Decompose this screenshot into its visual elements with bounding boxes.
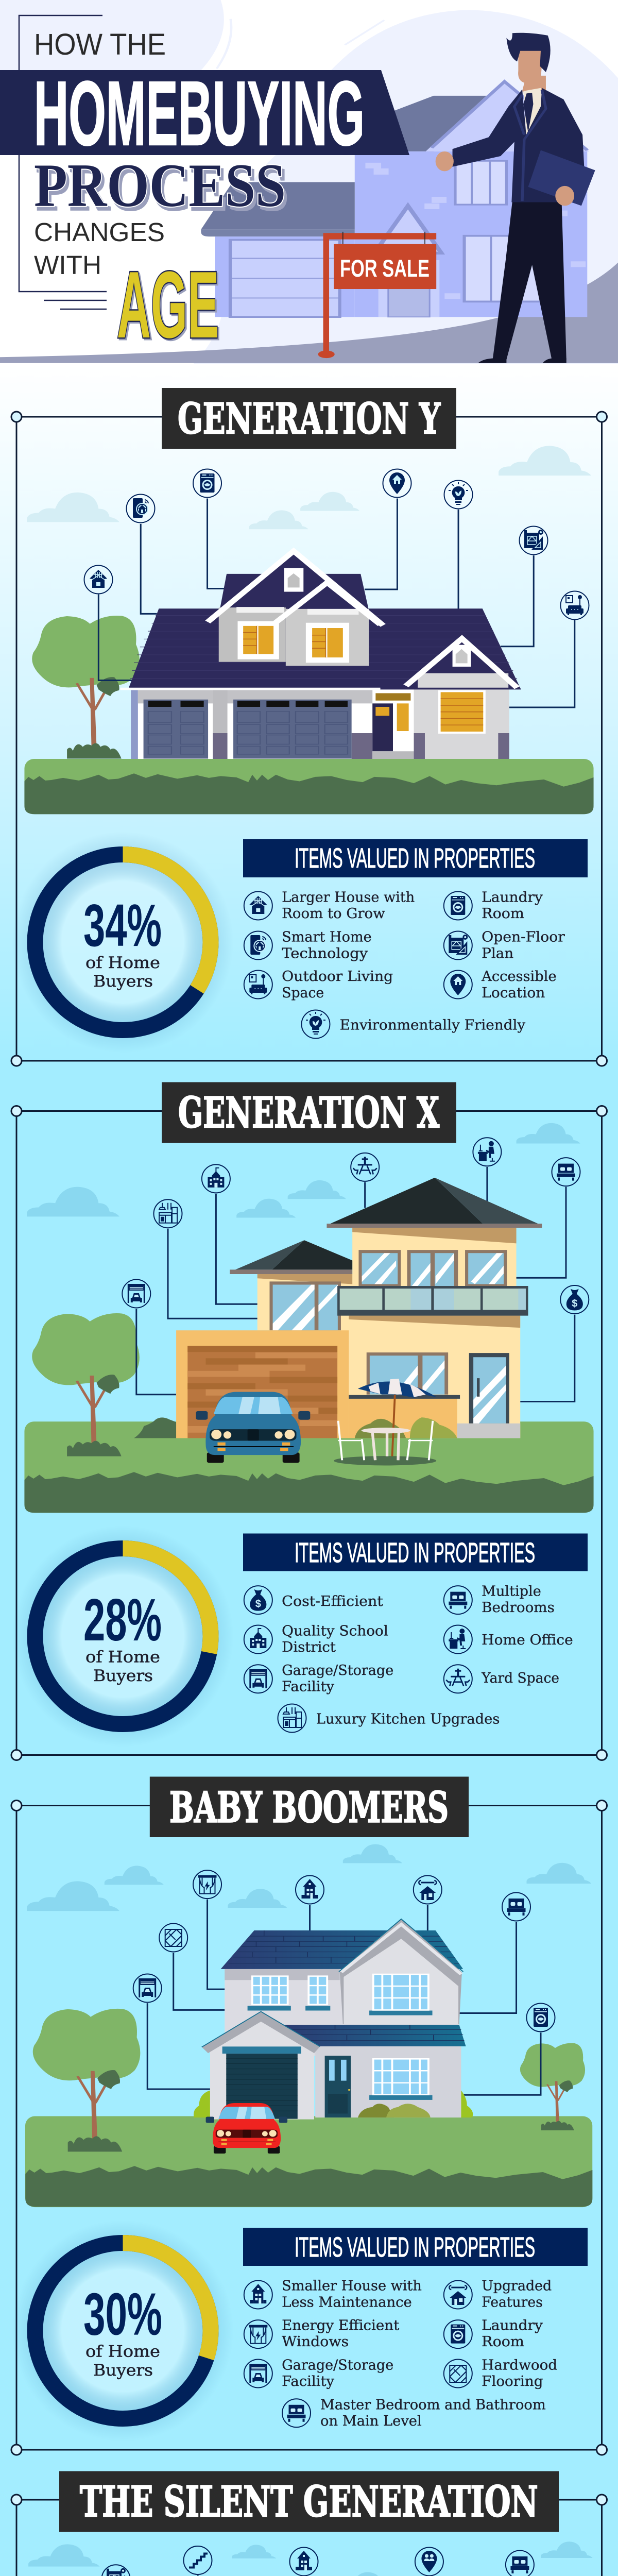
- item: garage storage: Garage/Storage: [282, 1663, 393, 1679]
- tree: [32, 616, 140, 759]
- item: accessible location: Location: [482, 985, 545, 1001]
- icon: laundry: [193, 469, 221, 498]
- donut chart: 34%: [12, 832, 234, 1053]
- item: hardwood flooring: [444, 2358, 557, 2389]
- item: laundry room: [444, 890, 543, 922]
- item: school district: [244, 1623, 388, 1655]
- item: cost-efficient: [244, 1586, 383, 1614]
- item: open floor plan: [444, 929, 565, 961]
- car: blue: [196, 1392, 310, 1463]
- item: hardwood flooring: Hardwood: [482, 2358, 557, 2373]
- for sale sign: FOR SALE: [340, 255, 430, 282]
- item: outdoor living: Space: [282, 985, 324, 1001]
- icon: kitchen: [153, 1199, 182, 1228]
- items panel: [243, 1533, 588, 1732]
- icon: laundry: [526, 2003, 555, 2032]
- clouds: [27, 446, 591, 529]
- item: laundry room: [444, 2317, 543, 2350]
- item: energy windows: Energy Efficient: [282, 2317, 399, 2333]
- callout lines: [98, 498, 575, 707]
- item: smart home: Technology: [282, 945, 368, 961]
- item: smart home: Smart Home: [282, 929, 372, 945]
- item: open floor plan: Plan: [482, 945, 513, 961]
- section: generation x: [10, 1082, 608, 1761]
- icon: school: [202, 1164, 230, 1193]
- donut chart: 28%: Buyers: [93, 1667, 153, 1685]
- title: with: WITH: [34, 250, 101, 280]
- item: open floor plan: Open-Floor: [482, 929, 565, 945]
- scene: house with callouts: [25, 1844, 592, 2207]
- icon: garage: [122, 1280, 150, 1308]
- icon: smaller house: [289, 2547, 318, 2576]
- items panel: [243, 2228, 588, 2429]
- callout lines: [67, 2575, 573, 2576]
- donut chart: 34%: Buyers: [93, 972, 153, 991]
- callout lines: [136, 1167, 575, 1402]
- icon: floor plan: [519, 527, 548, 554]
- ground hedge: [25, 2166, 592, 2207]
- item: master bedroom: [282, 2397, 546, 2429]
- item: yard space: Yard Space: [481, 1670, 559, 1686]
- item: larger house: Larger House with: [282, 890, 415, 906]
- hero background: [0, 0, 618, 365]
- panel heading: [243, 1533, 588, 1571]
- icon: floor plan: [102, 2565, 130, 2576]
- item: larger house: [244, 890, 415, 922]
- item: multiple bedrooms: [444, 1583, 555, 1616]
- heading: [162, 388, 456, 449]
- item: garage storage: Garage/Storage: [282, 2358, 393, 2373]
- item: garage storage: Facility: [282, 2374, 335, 2389]
- donut chart: 28%: 28%: [83, 1586, 162, 1653]
- icon: upgraded features: [414, 1875, 442, 1904]
- item: multiple bedrooms: Multiple: [482, 1583, 541, 1599]
- title: how the: HOW THE: [34, 28, 166, 61]
- item: energy windows: [244, 2317, 399, 2350]
- donut chart: 34%: of Home: [85, 954, 160, 972]
- item: environmentally friendly: [302, 1010, 526, 1039]
- ground hedge: [24, 773, 594, 814]
- item: garage storage: [244, 2358, 393, 2389]
- icon: master bedroom: [502, 1893, 530, 1921]
- item: smart home: [244, 929, 372, 961]
- section: baby boomers: [10, 1776, 608, 2455]
- item: upgraded features: [444, 2278, 552, 2311]
- item: school district: Quality School: [282, 1623, 388, 1639]
- item: home office: Home Office: [482, 1632, 573, 1648]
- item: garage storage: [244, 1663, 393, 1695]
- item: laundry room: Laundry: [482, 2317, 543, 2333]
- section: generation y: [10, 388, 608, 1066]
- icon: friends and family: [415, 2547, 443, 2576]
- icon: windows: [193, 1870, 221, 1899]
- heading: GENERATION X: [178, 1089, 439, 1138]
- items panel: [243, 839, 588, 1039]
- item: master bedroom: Master Bedroom and Bathroom: [320, 2397, 546, 2413]
- icon: larger house: [84, 566, 112, 594]
- icon: home office: [473, 1138, 501, 1166]
- icon: smaller house: [296, 1875, 324, 1904]
- donut chart: 30%: [12, 2220, 234, 2442]
- ground: [25, 2116, 592, 2207]
- item: laundry room: Room: [482, 2334, 524, 2350]
- item: accessible location: Accessible: [481, 969, 557, 985]
- item: school district: District: [282, 1639, 336, 1655]
- house: [120, 551, 521, 759]
- for sale sign: [318, 232, 436, 358]
- item: multiple bedrooms: Bedrooms: [482, 1600, 555, 1616]
- item: garage storage: Facility: [282, 1679, 335, 1695]
- header hero: AGE: [117, 251, 219, 358]
- item: environmentally friendly: Environmentally Friendly: [340, 1018, 526, 1033]
- item: outdoor living: [244, 969, 393, 1001]
- item: laundry room: Room: [482, 906, 524, 922]
- ground hedge: [24, 1472, 594, 1513]
- scene: house with callouts: [24, 1123, 594, 1513]
- clouds: [27, 1123, 580, 1218]
- item: cost-efficient: Cost-Efficient: [282, 1594, 383, 1609]
- tree: left: [33, 2009, 140, 2151]
- item: smaller house: [244, 2278, 422, 2311]
- icon: outdoor living: [560, 591, 589, 619]
- ground: [24, 759, 594, 814]
- section: the silent generation: [10, 2471, 608, 2576]
- item: home office: [444, 1625, 573, 1654]
- donut chart: 28%: of Home: [85, 1648, 160, 1666]
- icon: garage: [133, 1974, 162, 2002]
- title: process: PROCESS: [34, 151, 286, 219]
- frame: [11, 1106, 607, 1760]
- donut chart: 34%: 34%: [83, 892, 162, 959]
- icon: money bag: [560, 1285, 589, 1314]
- realtor figure: [436, 33, 595, 363]
- frame: [11, 412, 607, 1066]
- item: yard space: [444, 1665, 559, 1693]
- title banner: [0, 70, 409, 155]
- scene: house with callouts: [24, 446, 594, 814]
- clouds: [27, 1844, 591, 1911]
- icon: yard: [351, 1153, 379, 1181]
- item: smaller house: Smaller House with: [282, 2278, 422, 2294]
- item: smaller house: Less Maintenance: [282, 2295, 412, 2311]
- header hero: [0, 0, 618, 364]
- icon: guest bedroom: [506, 2550, 534, 2576]
- heading: [162, 1082, 456, 1143]
- donut chart: 28%: [12, 1526, 234, 1747]
- tree: [32, 1313, 140, 1456]
- icon: hardwood: [159, 1924, 187, 1952]
- scene: house with callouts: [26, 2541, 593, 2576]
- icon: smart home: [127, 495, 154, 522]
- panel heading: [243, 2228, 588, 2266]
- item: upgraded features: Upgraded: [482, 2278, 552, 2294]
- donut chart: 30%: of Home: [85, 2342, 160, 2361]
- car: red: [206, 2103, 287, 2154]
- tree: right: [520, 2043, 585, 2130]
- heading: GENERATION Y: [178, 395, 441, 444]
- heading: BABY BOOMERS: [169, 1784, 449, 1833]
- item: energy windows: Windows: [282, 2334, 349, 2350]
- item: luxury kitchen: [278, 1704, 500, 1732]
- heading: [150, 1776, 469, 1837]
- callout lines: [147, 1900, 541, 2095]
- item: master bedroom: on Main Level: [320, 2413, 422, 2429]
- item: larger house: Room to Grow: [282, 906, 385, 922]
- ground: [24, 1421, 594, 1513]
- donut chart: 30%: 30%: [83, 2281, 162, 2348]
- icon: stairs: [183, 2546, 212, 2574]
- icon: eco bulb: [444, 480, 473, 509]
- item: laundry room: Laundry: [482, 890, 543, 906]
- item: luxury kitchen: Luxury Kitchen Upgrades: [316, 1711, 500, 1727]
- frame: [11, 2495, 607, 2576]
- house: [194, 1919, 473, 2120]
- clouds: [28, 2541, 593, 2576]
- item: upgraded features: Features: [482, 2295, 543, 2311]
- item: accessible location: [444, 969, 557, 1001]
- title frame lines: [19, 15, 107, 309]
- item: outdoor living: Outdoor Living: [282, 969, 393, 985]
- donut chart: 30%: Buyers: [93, 2361, 153, 2380]
- item: hardwood flooring: Flooring: [482, 2374, 543, 2389]
- panel heading: [243, 839, 588, 877]
- house: [134, 1178, 542, 1438]
- patio set: [334, 1379, 437, 1465]
- icon: bedrooms: [552, 1158, 580, 1186]
- frame: [11, 1800, 607, 2455]
- icon: location: [383, 469, 411, 498]
- title: changes: CHANGES: [34, 217, 165, 247]
- house illustration: [201, 79, 589, 317]
